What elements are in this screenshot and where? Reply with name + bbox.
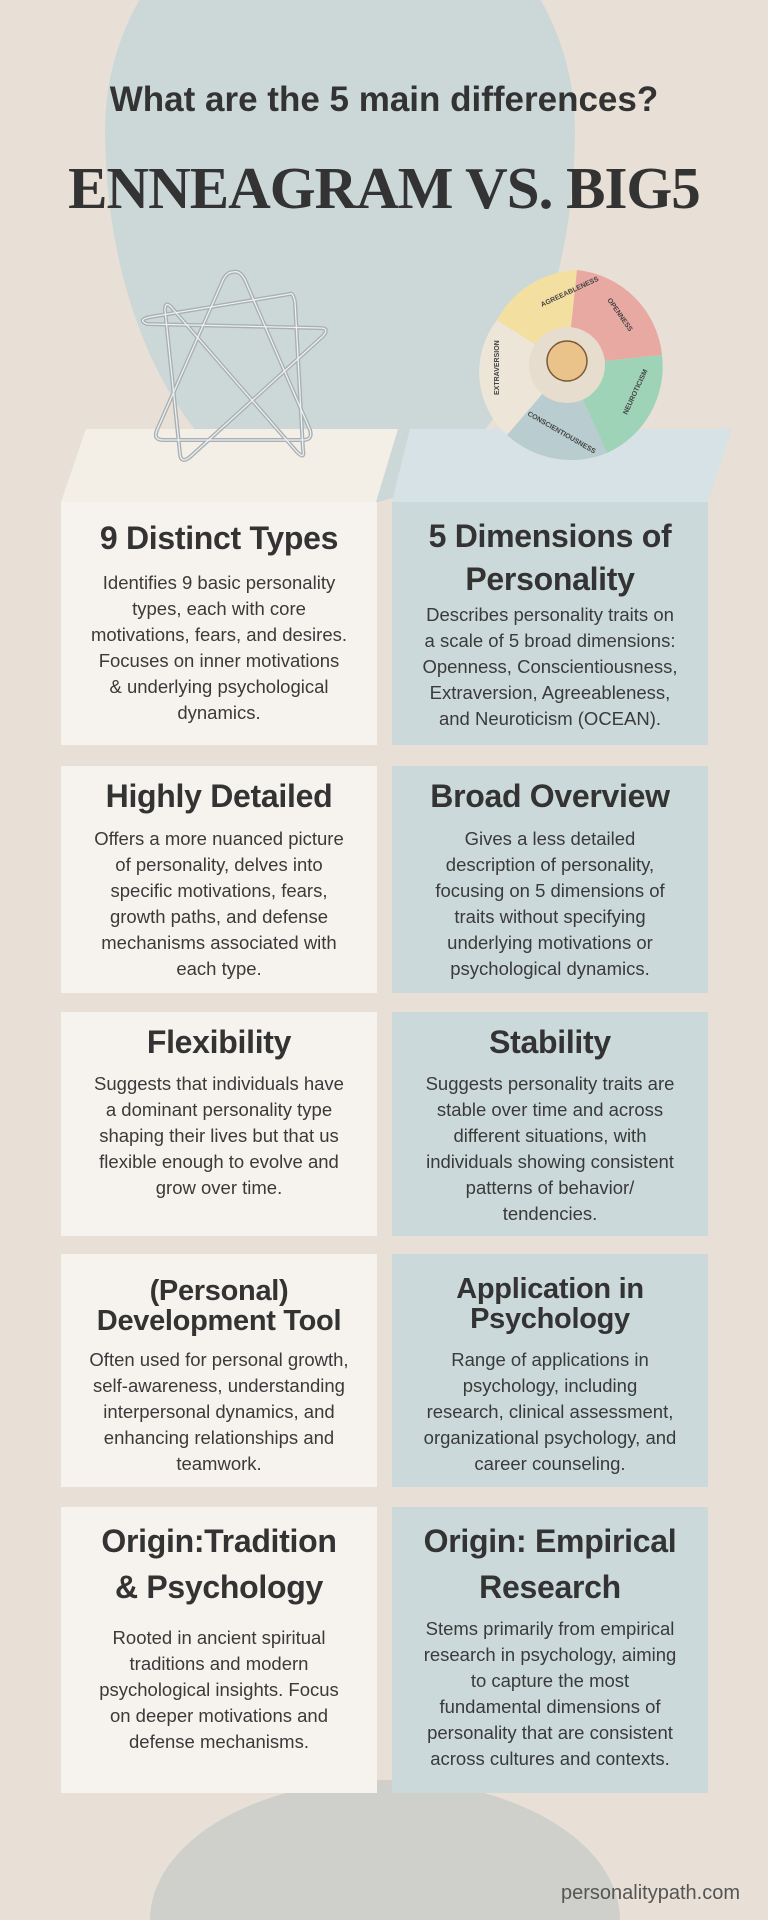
card: application in psychology: career counseling. <box>474 1453 626 1474</box>
card: 5 dimensions: 5 Dimensions of <box>429 518 671 554</box>
card: 9 distinct types: dynamics. <box>177 702 261 723</box>
card: highly detailed: growth paths, and defense <box>110 906 328 927</box>
card: application in psychology <box>392 1254 708 1487</box>
card: broad overview: focusing on 5 dimensions of <box>435 880 665 901</box>
footer url: personalitypath.com <box>561 1882 740 1904</box>
card: flexibility: Flexibility <box>147 1024 291 1060</box>
card: stability: stable over time and across <box>437 1099 663 1120</box>
card: highly detailed: Offers a more nuanced picture <box>94 828 344 849</box>
card: origin empirical: Stems primarily from empirical <box>426 1618 674 1639</box>
card: highly detailed: mechanisms associated with <box>101 932 337 953</box>
subtitle: What are the 5 main differences? <box>110 80 658 119</box>
card: 5 dimensions: Openness, Conscientiousness, <box>422 656 678 677</box>
card: highly detailed: each type. <box>176 958 262 979</box>
card: flexibility: a dominant personality type <box>106 1099 332 1120</box>
icon: big five wheel: CONSCIENTIOUSNESS <box>526 411 597 456</box>
card: flexibility: Suggests that individuals have <box>94 1073 344 1094</box>
card: origin tradition: Origin:Tradition <box>101 1523 337 1559</box>
background blob: blue top <box>105 0 575 505</box>
card: development tool: Often used for personal growth, <box>89 1349 349 1370</box>
card: origin tradition <box>61 1507 377 1793</box>
card: 9 distinct types: & underlying psychological <box>109 676 329 697</box>
card: origin empirical: Origin: Empirical <box>424 1523 676 1559</box>
title: ENNEAGRAM VS. BIG5 <box>68 155 700 221</box>
card: broad overview <box>392 766 708 993</box>
card: 9 distinct types: 9 Distinct Types <box>100 520 338 556</box>
card: 5 dimensions: Extraversion, Agreeableness, <box>430 682 670 703</box>
card: broad overview: description of personality, <box>446 854 654 875</box>
icon: big five wheel: NEUROTICISM <box>622 368 650 416</box>
card: application in psychology: Psychology <box>470 1303 630 1335</box>
card: flexibility: shaping their lives but that us <box>99 1125 339 1146</box>
card: origin empirical <box>392 1507 708 1793</box>
card: origin tradition: & Psychology <box>115 1569 323 1605</box>
card: origin empirical: Research <box>479 1569 621 1605</box>
card: development tool: teamwork. <box>176 1453 262 1474</box>
card: highly detailed: specific motivations, fears, <box>111 880 327 901</box>
card: origin empirical: personality that are consistent <box>427 1722 673 1743</box>
card: 9 distinct types <box>61 502 377 745</box>
card: 9 distinct types: motivations, fears, and desires. <box>91 624 347 645</box>
icon: big five wheel: AGREEABLENESS <box>540 276 600 309</box>
card: stability: different situations, with <box>454 1125 646 1146</box>
pedestal tops <box>61 429 732 502</box>
card: highly detailed: of personality, delves into <box>115 854 323 875</box>
card: stability: Stability <box>489 1024 611 1060</box>
icon: big five wheel <box>479 270 663 460</box>
card: highly detailed <box>61 766 377 993</box>
card: stability: patterns of behavior/ <box>466 1177 634 1198</box>
card: broad overview: psychological dynamics. <box>450 958 650 979</box>
background blob: gray bottom <box>150 1780 620 1920</box>
card: stability: tendencies. <box>503 1203 597 1224</box>
card: application in psychology: organizational psychology, and <box>424 1427 676 1448</box>
card: broad overview: Broad Overview <box>430 778 670 814</box>
card: development tool <box>61 1254 377 1487</box>
icon: big five wheel: EXTRAVERSION <box>494 340 501 395</box>
icon: enneagram <box>140 270 328 462</box>
card: origin empirical: research in psychology, aiming <box>424 1644 676 1665</box>
card: 5 dimensions: Personality <box>465 561 635 597</box>
card: broad overview: Gives a less detailed <box>465 828 635 849</box>
card: stability <box>392 1012 708 1236</box>
card: application in psychology: Range of applications in <box>451 1349 649 1370</box>
card: broad overview: underlying motivations or <box>447 932 653 953</box>
card: 9 distinct types: Identifies 9 basic personality <box>103 572 335 593</box>
card: origin tradition: Rooted in ancient spiritual <box>113 1627 325 1648</box>
card: development tool: self-awareness, understanding <box>93 1375 345 1396</box>
card: origin empirical: fundamental dimensions of <box>439 1696 661 1717</box>
card: highly detailed: Highly Detailed <box>106 778 332 814</box>
card: origin empirical: to capture the most <box>471 1670 629 1691</box>
card: flexibility: grow over time. <box>156 1177 282 1198</box>
card: origin empirical: across cultures and contexts. <box>430 1748 670 1769</box>
card: development tool: (Personal) <box>150 1275 288 1307</box>
card: flexibility: flexible enough to evolve and <box>99 1151 339 1172</box>
card: development tool: interpersonal dynamics, and <box>103 1401 335 1422</box>
card: origin tradition: defense mechanisms. <box>129 1731 309 1752</box>
card: 9 distinct types: types, each with core <box>132 598 306 619</box>
card: origin tradition: traditions and modern <box>130 1653 308 1674</box>
card: 5 dimensions: Describes personality traits on <box>426 604 674 625</box>
card: origin tradition: psychological insights. Focus <box>99 1679 339 1700</box>
card: 9 distinct types: Focuses on inner motivations <box>99 650 339 671</box>
card: 5 dimensions: a scale of 5 broad dimensions: <box>425 630 675 651</box>
card: 5 dimensions: and Neuroticism (OCEAN). <box>439 708 661 729</box>
card: flexibility <box>61 1012 377 1236</box>
card: development tool: enhancing relationships and <box>104 1427 334 1448</box>
card: origin tradition: on deeper motivations and <box>110 1705 328 1726</box>
card: stability: individuals showing consistent <box>426 1151 674 1172</box>
card: application in psychology: research, clinical assessment, <box>427 1401 673 1422</box>
card: broad overview: traits without specifying <box>454 906 646 927</box>
card: application in psychology: psychology, including <box>463 1375 637 1396</box>
card: application in psychology: Application in <box>456 1273 644 1305</box>
icon: big five wheel: OPENNESS <box>605 297 634 333</box>
card: 5 dimensions <box>392 502 708 745</box>
card: stability: Suggests personality traits are <box>426 1073 674 1094</box>
card: development tool: Development Tool <box>97 1305 341 1337</box>
